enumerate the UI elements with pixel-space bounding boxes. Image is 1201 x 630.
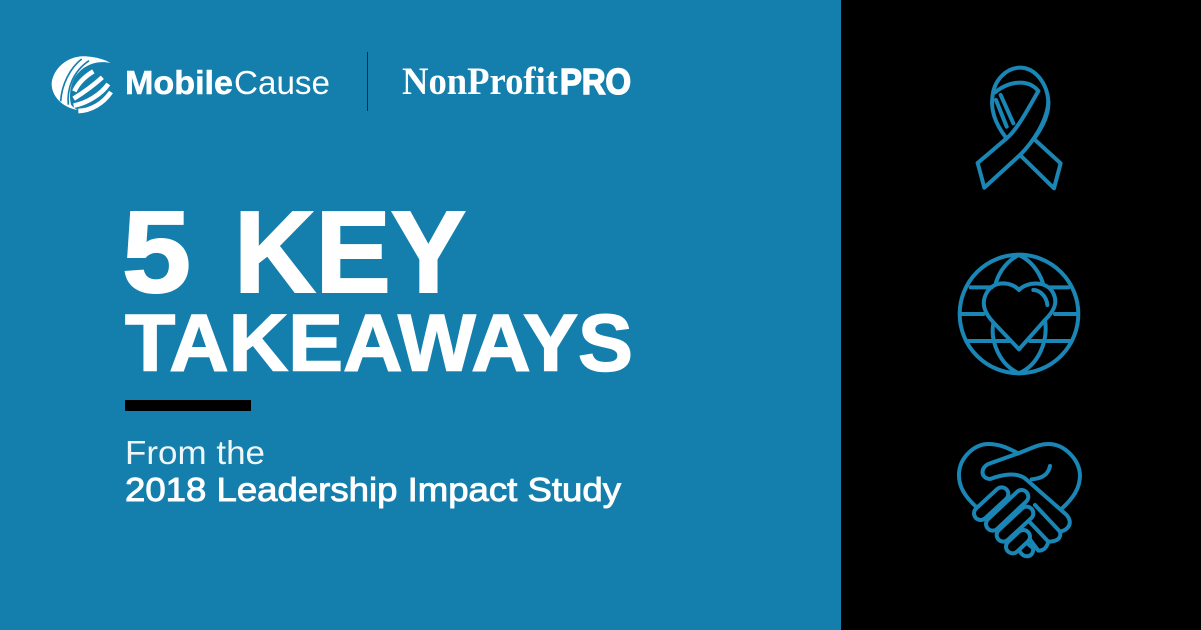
logo: NonProfit PRO — [402, 60, 631, 103]
icon: handshake heart — [959, 444, 1080, 556]
heading line: TAKEAWAYS: TAKEAWAYS — [125, 298, 633, 388]
icon: globe with heart — [960, 255, 1078, 373]
icon: MobileCause globe — [52, 56, 111, 111]
logo: MobileCause — [52, 56, 330, 111]
subtitle — [125, 434, 622, 508]
heading line: 5 KEY — [122, 187, 466, 317]
heading: 5 KEY TAKEAWAYS — [122, 187, 633, 388]
text: PRO: PRO — [560, 61, 631, 102]
panel: blue title panel — [0, 0, 841, 630]
subtitle line: From the: From the — [125, 434, 265, 471]
subtitle line: study name: 2018 Leadership Impact Study — [125, 471, 622, 508]
icon: awareness ribbon — [978, 68, 1061, 188]
text: Mobile: Mobile — [125, 64, 233, 101]
accent bar — [125, 400, 251, 411]
text: NonProfit: NonProfit — [402, 60, 558, 103]
heading word: 5: 5 — [122, 187, 191, 317]
divider between logos — [367, 52, 368, 111]
text: Cause: Cause — [234, 64, 330, 101]
heading word: KEY: KEY — [234, 187, 466, 317]
